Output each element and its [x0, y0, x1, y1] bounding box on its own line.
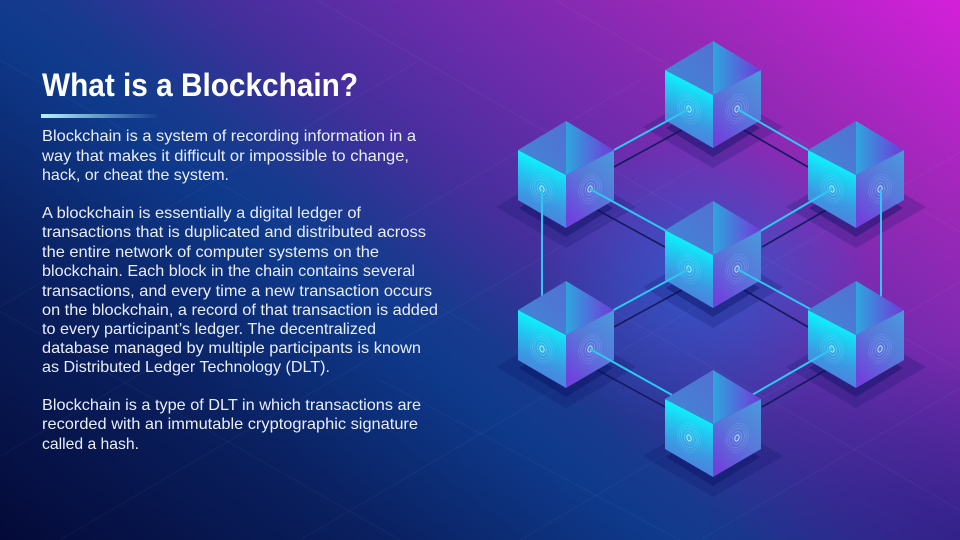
cube: lower right [808, 281, 904, 388]
cube: lower left [518, 281, 614, 388]
text block: definition [41, 128, 416, 184]
dark connector shadows [590, 126, 833, 407]
blockchain network diagram [496, 41, 926, 497]
text block: digital ledger: the entire network of computer systems on the [42, 244, 379, 261]
text block: DLT and hash: called a hash. [42, 436, 139, 453]
connectors from upper cubes [542, 189, 881, 300]
connectors from center cube [610, 269, 812, 312]
cube shadows [496, 86, 926, 497]
title: What is a Blockchain? [42, 67, 358, 103]
text block: digital ledger: transactions, and every time a new transaction occurs [42, 283, 432, 300]
cube: center [665, 201, 761, 308]
text block: DLT and hash [42, 397, 421, 453]
text block: DLT and hash: Blockchain is a type of DLT in which transactions are [42, 397, 421, 414]
text block: definition: way that makes it difficult or impossible to change, [41, 148, 409, 165]
cube: top [665, 41, 761, 148]
text block: digital ledger: as Distributed Ledger Technology (DLT). [42, 359, 330, 376]
text block: definition: Blockchain is a system of recording information in a [42, 128, 416, 145]
text block: digital ledger: A blockchain is essentially a digital ledger of [42, 205, 362, 222]
text block: digital ledger: database managed by multiple participants is known [42, 340, 421, 357]
connectors from top cube [614, 109, 808, 150]
title underline [41, 114, 160, 118]
cube: upper left [518, 121, 614, 228]
text block: digital ledger: on the blockchain, a record of that transaction is added [42, 302, 438, 319]
text block: DLT and hash: recorded with an immutable cryptographic signature [42, 416, 418, 433]
cube: upper right [808, 121, 904, 228]
connectors to bottom cube [590, 349, 832, 395]
text block: digital ledger: to every participant’s ledger. The decentralized [42, 321, 376, 338]
text block: definition: hack, or cheat the system. [42, 167, 229, 184]
text block: digital ledger: blockchain. Each block in the chain contains several [42, 263, 415, 280]
text block: digital ledger: transactions that is duplicated and distributed across [42, 224, 426, 241]
text block: digital ledger [42, 205, 438, 376]
cube: bottom [665, 370, 761, 477]
